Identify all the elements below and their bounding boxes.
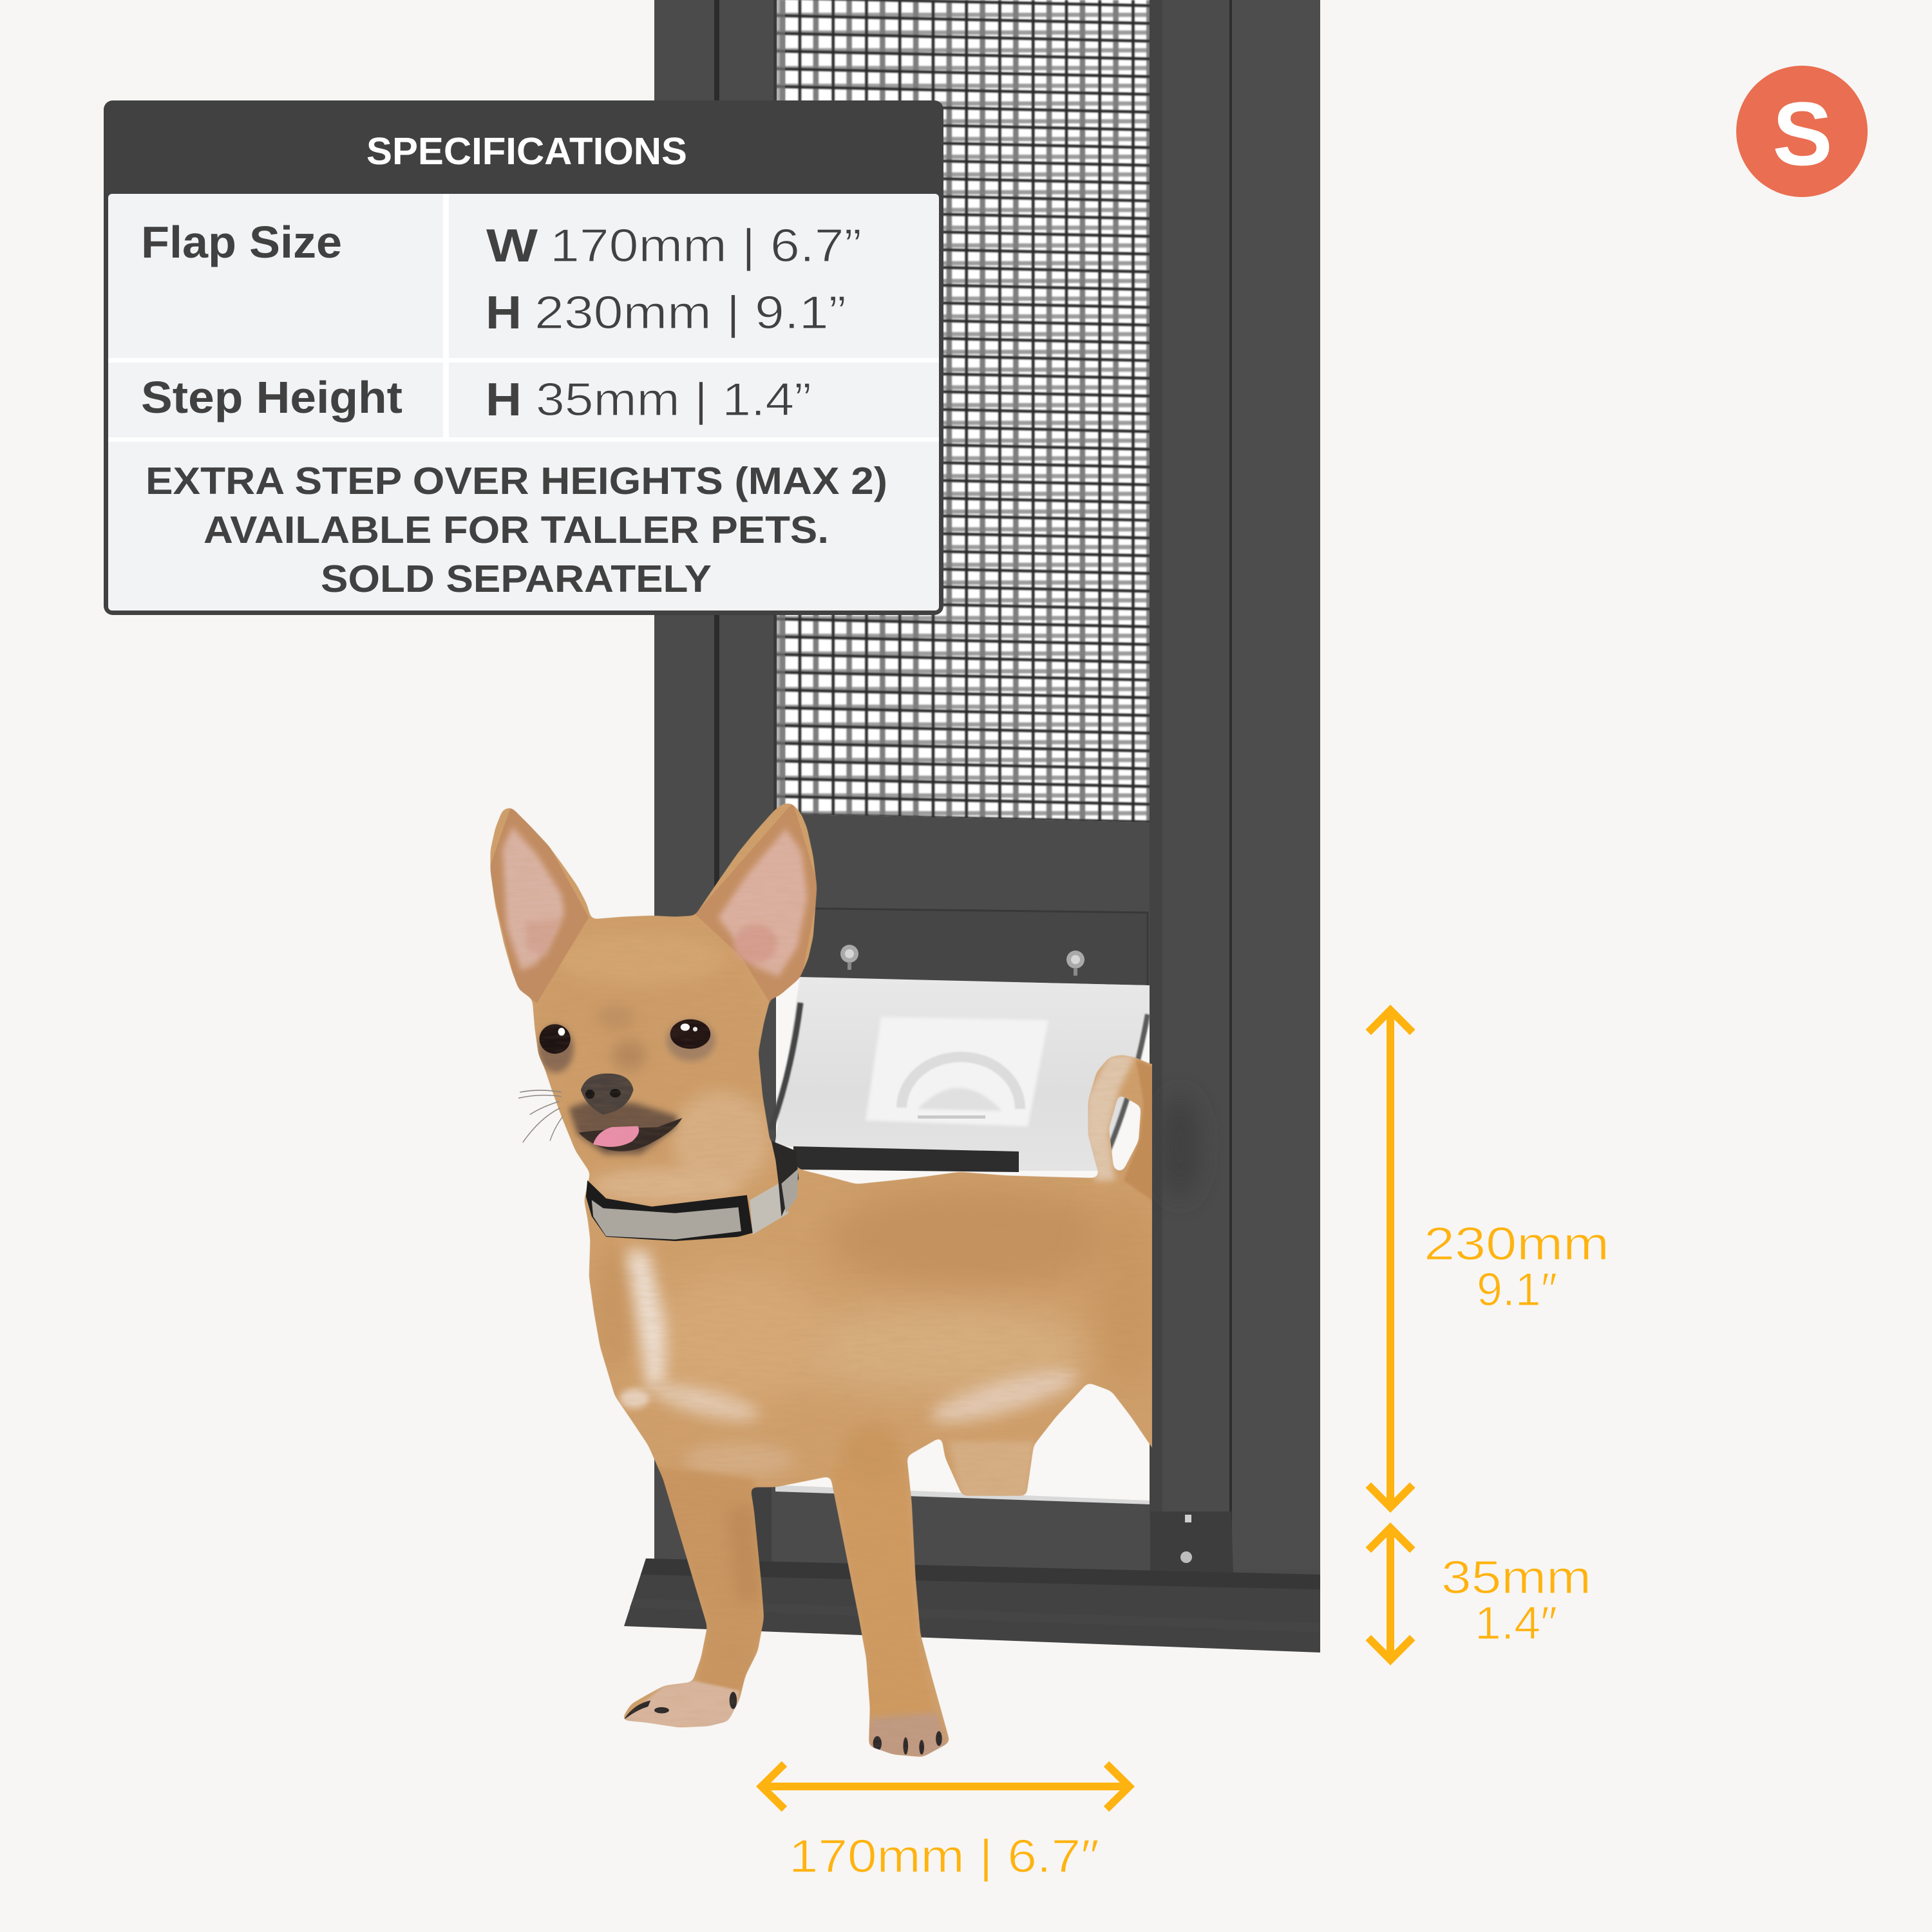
tongue bbox=[593, 1126, 639, 1147]
whiskers bbox=[518, 1090, 563, 1142]
arrow: step height bbox=[1368, 1528, 1412, 1660]
extra step note: EXTRA STEP OVER HEIGHTS (MAX 2) bbox=[146, 460, 887, 502]
threshold base bbox=[624, 1558, 1320, 1653]
left eye bbox=[540, 1024, 571, 1054]
flap hood with screws bbox=[776, 908, 1148, 985]
lower bar and bracket bbox=[719, 1475, 1233, 1575]
panel body bbox=[108, 194, 939, 611]
extra step note: AVAILABLE FOR TALLER PETS. bbox=[204, 509, 829, 551]
legs bbox=[621, 1425, 951, 1757]
flap height value: H bbox=[486, 287, 522, 339]
step height value: H bbox=[486, 374, 522, 426]
panel frame bbox=[104, 100, 943, 615]
dog body bbox=[490, 804, 1152, 1757]
fur texture bbox=[444, 764, 1232, 1799]
right eye bbox=[670, 1019, 710, 1049]
flap width value: 170mm | 6.7” bbox=[550, 220, 862, 272]
size badge: S bbox=[1772, 83, 1833, 184]
specifications panel bbox=[104, 100, 943, 615]
flap bbox=[771, 977, 1150, 1172]
door frame body bbox=[654, 0, 1320, 1578]
panel heading: SPECIFICATIONS bbox=[366, 130, 687, 173]
label: flap height: 230mm bbox=[1424, 1218, 1609, 1270]
paw claws bbox=[623, 1692, 942, 1755]
label: flap height: 9.1″ bbox=[1477, 1264, 1557, 1316]
eye patches bbox=[538, 1025, 574, 1072]
mouth bbox=[579, 1118, 682, 1151]
left ear bbox=[488, 806, 589, 1003]
label: step height: 35mm bbox=[1441, 1552, 1591, 1604]
brow bridge bbox=[596, 1006, 636, 1029]
extra step note: SOLD SEPARATELY bbox=[321, 558, 712, 600]
label: flap width: 170mm | 6.7″ bbox=[789, 1831, 1099, 1882]
pet door frame bbox=[624, 0, 1320, 1653]
label: step height: 1.4″ bbox=[1475, 1598, 1557, 1649]
flap height value: 230mm | 9.1” bbox=[535, 287, 846, 339]
nose bbox=[581, 1074, 634, 1115]
chest white fur bbox=[620, 1251, 795, 1477]
tail bbox=[1084, 1055, 1153, 1201]
arrow: flap width bbox=[761, 1764, 1130, 1809]
right eye patch bbox=[667, 1020, 715, 1061]
mesh screen bbox=[766, 0, 1159, 837]
flap size label: Flap Size bbox=[141, 217, 342, 267]
flap width value: W bbox=[486, 220, 538, 272]
frame shading lines bbox=[714, 0, 1320, 1571]
face detail bbox=[488, 802, 819, 1154]
head fur bbox=[591, 1090, 772, 1207]
extra step note bbox=[146, 460, 887, 600]
door opening bbox=[776, 977, 1150, 1503]
step height label: Step Height bbox=[141, 372, 402, 422]
label: step height bbox=[1441, 1552, 1591, 1649]
right ear bbox=[695, 802, 819, 1003]
size badge bbox=[1736, 66, 1868, 197]
dog bbox=[490, 804, 1152, 1757]
collar bbox=[586, 1141, 799, 1241]
torso shading bbox=[594, 1187, 1162, 1503]
label: flap height bbox=[1424, 1218, 1609, 1316]
arrow: flap height bbox=[1368, 1010, 1412, 1508]
nose bridge tone bbox=[612, 1041, 647, 1070]
step height value: 35mm | 1.4” bbox=[536, 374, 811, 426]
table dividers bbox=[108, 194, 939, 442]
muzzle bbox=[569, 1101, 678, 1154]
